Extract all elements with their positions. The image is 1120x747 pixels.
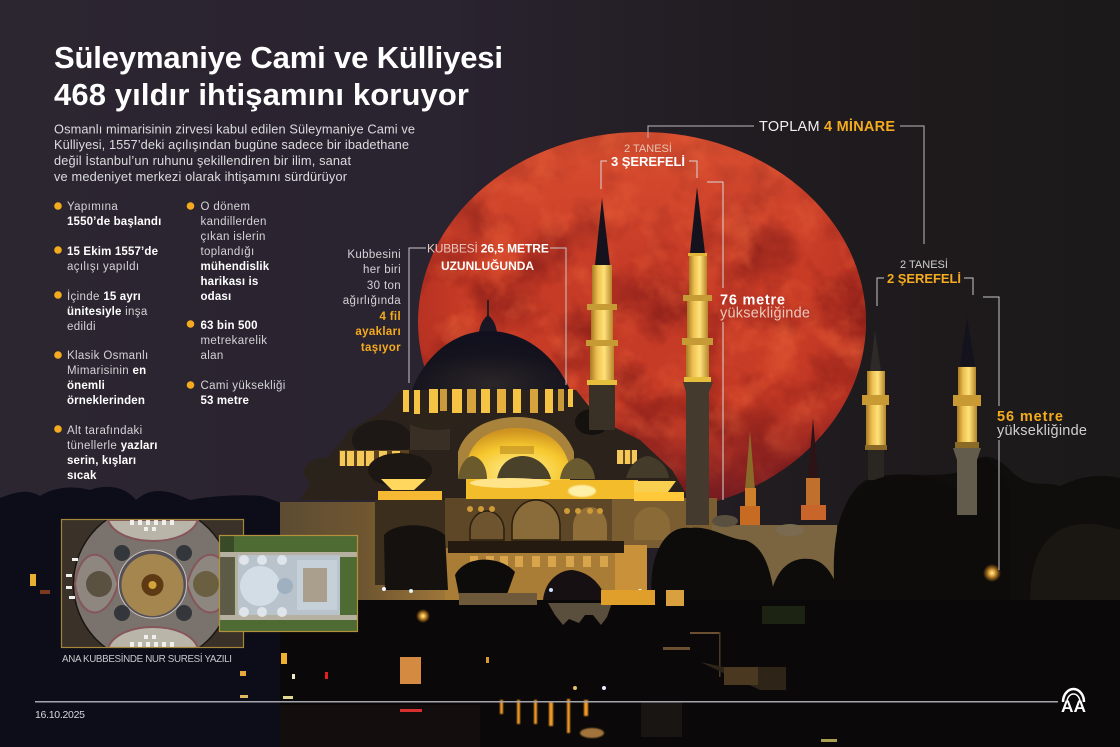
foreground trees <box>384 459 1120 600</box>
bullet: units <box>54 290 148 333</box>
text: four elephant feet pillars: her biri <box>363 264 401 276</box>
text: four elephant feet pillars: ağırlığında <box>343 295 401 307</box>
callout: 3 balconies: 3 ŞEREFELİ <box>611 154 685 169</box>
bullet: start of construction: 1550’de başlandı <box>67 216 161 228</box>
callout: 56 metres: yüksekliğinde <box>997 423 1087 439</box>
bullet: units: ünitesiyle inşa <box>67 306 148 318</box>
drum windows: golden bars <box>403 389 573 414</box>
right minaret lower stem <box>953 448 981 515</box>
minaret: left tall <box>586 198 618 430</box>
callout: 76 metres: yüksekliğinde <box>720 306 810 322</box>
callout: total minarets <box>648 118 924 244</box>
central lit arch <box>458 417 574 482</box>
callout: 56 metres: 56 metre <box>997 409 1063 425</box>
minaret: small centre pair <box>740 418 826 526</box>
text: four elephant feet pillars: Kubbesini <box>347 249 401 261</box>
bullet: tunnels: tünellerle yazları <box>67 440 158 452</box>
callout: 3 balconies <box>601 142 697 189</box>
text: four elephant feet pillars <box>343 249 401 354</box>
bullet: soot room: toplandığı <box>200 246 255 258</box>
mosque main dome <box>412 300 570 390</box>
bullet: start of construction <box>54 201 161 228</box>
title: Süleymaniye Cami ve Külliyesi <box>54 40 503 75</box>
callout: 3 balconies: 2 TANESİ <box>624 142 672 155</box>
bullet: area: alan <box>200 350 224 362</box>
outer walls <box>280 498 717 600</box>
bullet: area: 63 bin 500 <box>200 320 258 332</box>
bullet: soot room: mühendislik <box>200 261 270 273</box>
minaret: right pair, faint <box>862 317 981 480</box>
bullet list: right column <box>187 201 286 407</box>
bullet: soot room: odası <box>200 291 231 303</box>
bullet: units: İçinde 15 ayrı <box>67 290 141 303</box>
distant tree line and dark city base <box>0 457 1120 747</box>
bullet: opening: açılışı yapıldı <box>67 261 139 273</box>
bullet: height: 53 metre <box>200 395 249 407</box>
bullet: tunnels <box>54 425 158 482</box>
bullet: start of construction: Yapımına <box>67 201 118 213</box>
callout: 2 balconies: 2 ŞEREFELİ <box>887 271 961 286</box>
callout: dome diameter <box>409 242 566 385</box>
text: four elephant feet pillars: 30 ton <box>367 280 401 292</box>
callout: 2 balconies <box>877 258 973 306</box>
caption for inset photos: ANA KUBBESİNDE NUR SURESİ YAZILI <box>62 654 232 665</box>
mosque upper body and half domes <box>300 390 690 500</box>
text: four elephant feet pillars: ayakları <box>355 326 401 338</box>
callout: 76 metres <box>707 182 810 500</box>
intro text: ve medeniyet merkezi olarak ihtişamını sürdürüyor <box>54 169 348 184</box>
text: four elephant feet pillars: 4 fil <box>379 311 401 323</box>
glowing gold bands <box>378 478 684 501</box>
small front domes <box>368 453 669 487</box>
bullet: soot room <box>187 201 270 303</box>
bullet: area: metrekarelik <box>200 335 267 347</box>
red full moon <box>418 132 866 512</box>
inset photo: dome interior <box>60 518 244 648</box>
minaret: right tall <box>682 187 713 525</box>
bullet: tunnels: sıcak <box>67 470 97 482</box>
bullet: opening: 15 Ekim 1557’de <box>67 246 158 258</box>
title: 468 yıldır ihtişamını koruyor <box>54 77 469 112</box>
footer line <box>35 701 1058 702</box>
bullet: importance <box>54 350 149 407</box>
bullet: soot room: harikası is <box>200 276 258 288</box>
bullet: tunnels: Alt tarafındaki <box>67 425 143 437</box>
text: four elephant feet pillars: taşıyor <box>361 342 401 354</box>
callout: dome diameter: UZUNLUĞUNDA <box>441 258 534 273</box>
callout: dome diameter: KUBBESİ 26,5 METRE <box>427 242 549 256</box>
bullet: soot room: kandillerden <box>200 216 267 228</box>
inset photo: aerial view <box>219 535 358 632</box>
lit side windows <box>339 450 637 466</box>
bullet: height <box>187 380 286 407</box>
intro text: değil İstanbul’un ruhunu şekillendiren bir ilim, sanat <box>54 153 351 168</box>
bullet: soot room: çıkan islerin <box>200 231 266 243</box>
bullet: opening <box>54 246 158 273</box>
intro text: Osmanlı mimarisinin zirvesi kabul edilen Süleymaniye Cami ve <box>54 122 415 136</box>
intro text: Külliyesi, 1557’deki açılışından bugüne sadece bir ibadethane <box>54 137 409 152</box>
row of small windows <box>467 506 603 514</box>
bullet: importance: Mimarisinin en <box>67 365 146 377</box>
bullet: importance: örneklerinden <box>67 395 145 407</box>
bullet: units: edildi <box>67 321 96 333</box>
AA logo <box>1061 689 1086 716</box>
bullet: importance: önemli <box>67 380 105 392</box>
AA logo: AA <box>1061 697 1086 716</box>
callout: 2 balconies: 2 TANESİ <box>900 258 948 271</box>
callout: 56 metres <box>983 297 1087 570</box>
city lights at lower area <box>30 564 1001 747</box>
bullet: area <box>187 320 267 362</box>
bullet: tunnels: serin, kışları <box>67 455 136 467</box>
title <box>54 40 503 112</box>
bullet list: left column <box>54 201 161 482</box>
lit buildings to the right <box>712 515 837 600</box>
intro text <box>54 122 415 184</box>
callout: total minarets: TOPLAM 4 MİNARE <box>759 118 895 135</box>
bullet: height: Cami yüksekliği <box>200 380 286 392</box>
bullet: soot room: O dönem <box>200 201 250 213</box>
bullet: importance: Klasik Osmanlı <box>67 350 149 362</box>
callout: 76 metres: 76 metre <box>720 292 785 308</box>
date: 16.10.2025 <box>35 709 85 721</box>
lower gallery windows <box>470 556 608 567</box>
